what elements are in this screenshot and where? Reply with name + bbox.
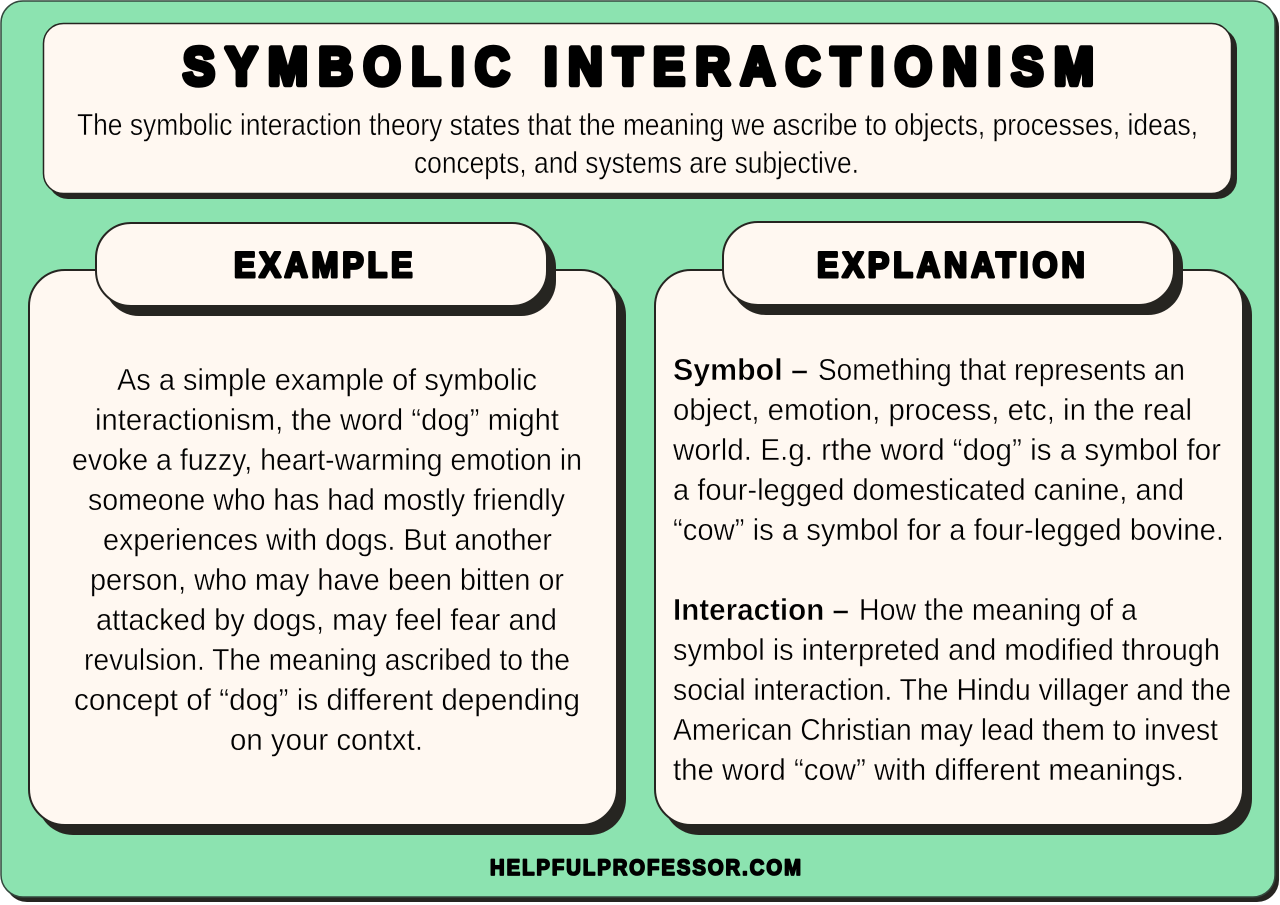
heading tab: example	[96, 223, 556, 316]
example body text: As a simple example of symbolic	[117, 362, 537, 397]
symbol definition: Symbol –	[673, 352, 808, 387]
panel: explanation	[655, 270, 1252, 835]
interaction definition: Interaction –	[673, 592, 849, 627]
interaction definition: How the meaning of a	[859, 592, 1138, 627]
example body text: interactionism, the word “dog” might	[95, 402, 559, 437]
example body text: evoke a fuzzy, heart-warming emotion in	[72, 442, 582, 477]
symbol definition: world. E.g. rthe word “dog” is a symbol for	[672, 432, 1221, 467]
symbol definition	[672, 352, 1224, 547]
symbol definition: “cow” is a symbol for a four-legged bovine.	[673, 512, 1224, 547]
heading tab: explanation	[723, 222, 1183, 315]
panel: example	[29, 270, 626, 835]
panel: header	[44, 24, 1237, 199]
example body text: revulsion. The meaning ascribed to the	[84, 642, 570, 677]
heading tab: explanation: EXPLANATION	[817, 247, 1085, 285]
example body text: someone who has had mostly friendly	[88, 482, 565, 517]
interaction definition: the word “cow” with different meanings.	[673, 752, 1184, 787]
interaction definition: American Christian may lead them to invest	[673, 712, 1218, 747]
symbol definition: a four-legged domesticated canine, and	[673, 472, 1184, 507]
interaction definition	[673, 592, 1231, 787]
subtitle	[77, 107, 1198, 180]
interaction definition: symbol is interpreted and modified through	[673, 632, 1220, 667]
subtitle: concepts, and systems are subjective.	[414, 145, 859, 180]
title: SYMBOLIC INTERACTIONISM	[183, 36, 1094, 96]
example body text: concept of “dog” is different depending	[74, 682, 580, 717]
footer website: HELPFULPROFESSOR.COM	[490, 856, 801, 880]
example body text: on your contxt.	[230, 722, 423, 757]
example body text: attacked by dogs, may feel fear and	[96, 602, 557, 637]
interaction definition: social interaction. The Hindu villager and the	[673, 672, 1231, 707]
example body text: person, who may have been bitten or	[90, 562, 564, 597]
symbol definition: Something that represents an	[818, 352, 1185, 387]
example body text: experiences with dogs. But another	[103, 522, 552, 557]
heading tab: example: EXAMPLE	[234, 247, 412, 285]
symbol definition: object, emotion, process, etc, in the real	[673, 392, 1192, 427]
example body text	[72, 362, 582, 757]
